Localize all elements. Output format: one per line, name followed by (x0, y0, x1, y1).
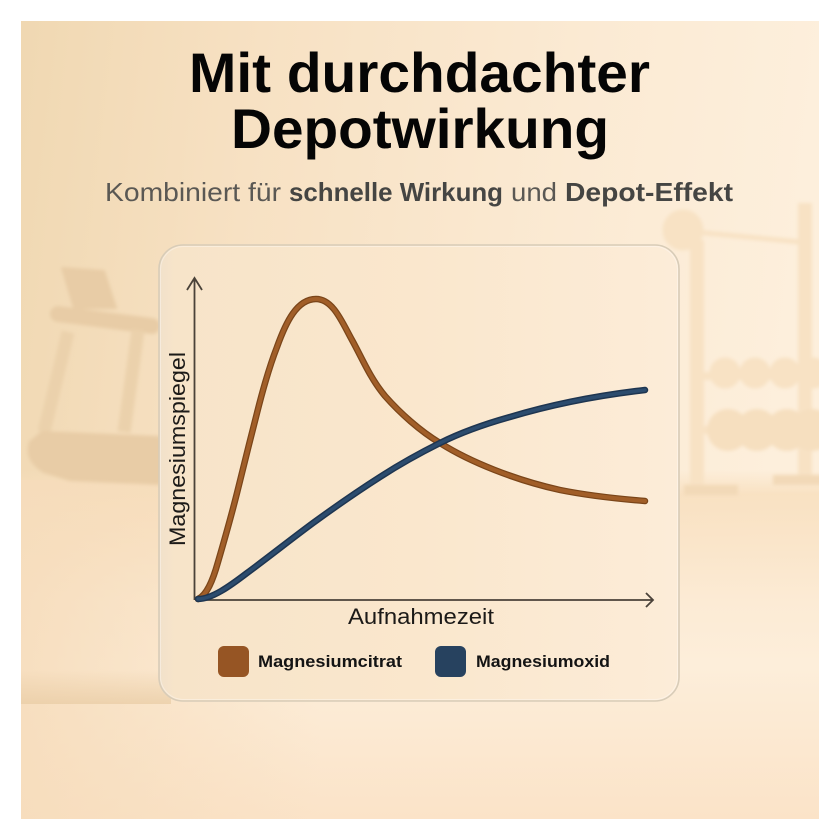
legend: Magnesiumcitrat: Magnesiumcitrat (258, 652, 402, 671)
legend: Magnesiumcitrat (218, 646, 402, 677)
title: Depotwirkung (231, 97, 609, 160)
y axis label: Magnesiumspiegel (165, 352, 190, 546)
panel: chart card (159, 245, 679, 701)
subtitle: schnelle Wirkung (289, 177, 503, 207)
y axis arrow (187, 278, 202, 600)
subtitle: Kombiniert für (105, 177, 281, 207)
weight rack silhouette (663, 203, 833, 490)
subtitle: und (511, 177, 557, 207)
curve: Magnesiumoxid (198, 390, 645, 599)
subtitle: Depot-Effekt (565, 177, 733, 207)
curve: Magnesiumcitrat (198, 299, 645, 599)
legend: Magnesiumoxid (435, 646, 610, 677)
legend: Magnesiumoxid: Magnesiumoxid (476, 652, 610, 671)
subtitle (105, 177, 733, 207)
x axis arrow (197, 593, 653, 607)
title: Mit durchdachter (189, 41, 650, 104)
treadmill silhouette (29, 268, 160, 484)
title (189, 41, 650, 160)
x axis label: Aufnahmezeit (348, 604, 494, 629)
